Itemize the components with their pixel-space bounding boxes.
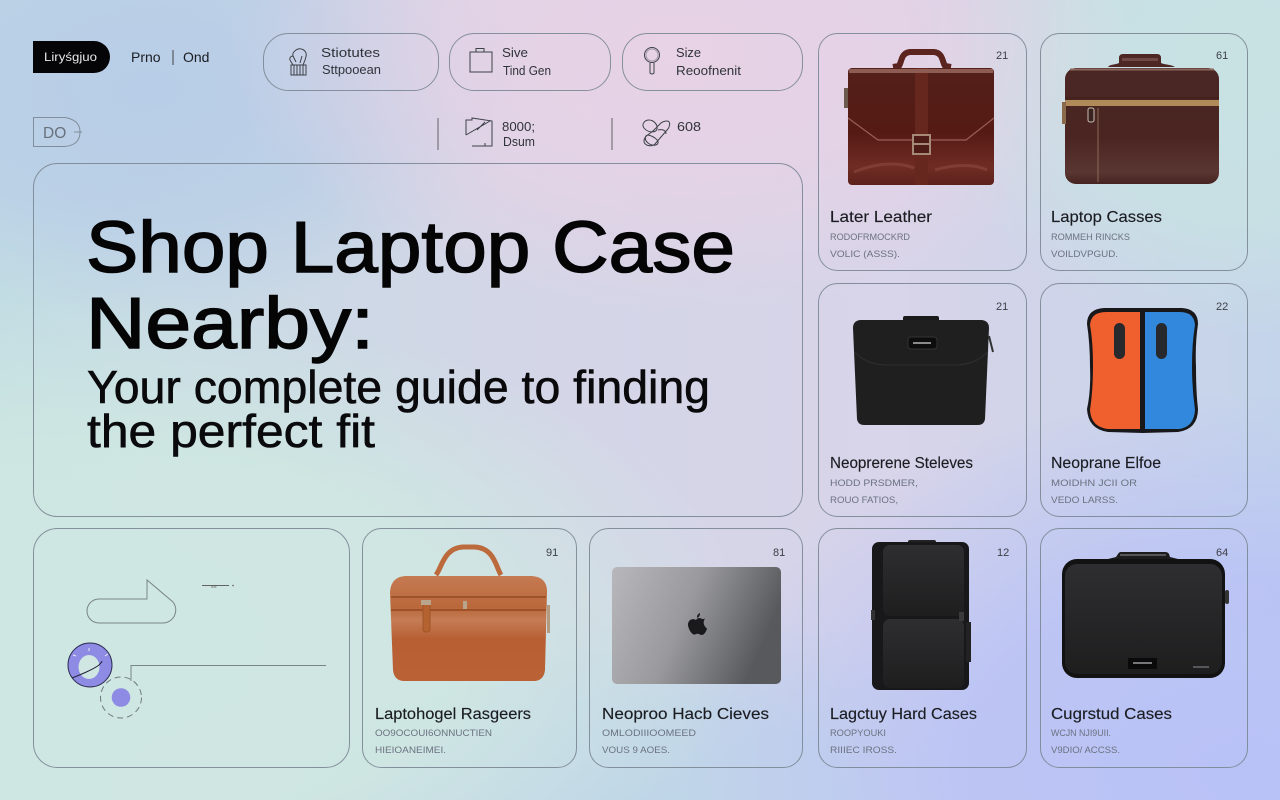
card description: OMLODIIIOOMEED — [602, 728, 696, 739]
card title: Laptohogel Rasgeers — [375, 706, 531, 723]
pill: structures — [264, 34, 438, 90]
pill: sive: Tind Gen — [503, 63, 551, 78]
pill: sive: Sive — [502, 45, 528, 60]
brand badge: Liryśgjuo — [44, 52, 97, 64]
pill: size: Size — [676, 45, 701, 60]
card: cugrstud cases — [1040, 528, 1248, 768]
stat: size count — [438, 118, 535, 150]
card description — [1051, 728, 1120, 756]
card description — [1051, 232, 1130, 260]
card description: ROUO FATIOS, — [830, 495, 898, 506]
card title: Neoproo Hacb Cieves — [602, 706, 769, 723]
number: 61 — [1216, 50, 1228, 62]
connector line — [131, 666, 326, 681]
title — [86, 208, 735, 364]
title: Nearby: — [86, 284, 374, 364]
card title: Laptop Casses — [1051, 209, 1162, 226]
pill: size: Reoofnenit — [676, 63, 741, 78]
brand badge — [33, 41, 110, 73]
icon: bulb dial — [68, 643, 112, 687]
pill: sive — [450, 34, 610, 90]
card description: HODD PRSDMER, — [830, 478, 918, 489]
pill: size — [622, 34, 802, 90]
subtitle: the perfect fit — [87, 405, 375, 457]
card description: MOIDHN JCII OR — [1051, 478, 1137, 489]
small label: ≡≡ — [211, 584, 217, 590]
card description — [602, 728, 696, 756]
card description: ROMMEH RINCKS — [1051, 232, 1130, 243]
small label — [202, 584, 234, 590]
stat: size count: 8000; — [502, 119, 535, 134]
card: neoproo hacb cieves — [590, 528, 802, 768]
tag: DO — [34, 118, 82, 146]
bag photo — [1087, 308, 1198, 433]
number: 81 — [773, 547, 785, 559]
icon: storefront bundle — [290, 49, 306, 75]
card description: VOLIC (ASSS). — [830, 249, 900, 260]
bag photo — [844, 52, 994, 185]
card: lagctuy hard cases — [818, 528, 1026, 768]
card: neoprane elfoe — [1040, 284, 1248, 516]
card description: ROOPYOUKI — [830, 728, 886, 739]
card: laptohogel rasgeers — [362, 528, 576, 768]
card description: WCJN NJI9UII. — [1051, 728, 1111, 739]
nav links: Ond — [183, 49, 209, 65]
card description: VOILDVPGUD. — [1051, 249, 1118, 260]
stat: 608 — [612, 118, 701, 150]
title: Shop Laptop Case — [86, 208, 735, 288]
icon: knot — [643, 120, 670, 146]
stat: size count: Dsum — [503, 134, 535, 149]
card description: HIEIOANEIMEI. — [375, 745, 446, 756]
laptop photo — [612, 567, 781, 684]
card: later leather — [818, 34, 1026, 270]
icon: box — [466, 118, 492, 146]
card title: Neoprane Elfoe — [1051, 455, 1161, 472]
card description: RODOFRMOCKRD — [830, 232, 910, 243]
subtitle: Your complete guide to finding — [87, 361, 710, 413]
stat: 608: 608 — [677, 119, 701, 134]
card description — [1051, 478, 1137, 506]
bag photo — [871, 540, 971, 690]
card description — [830, 232, 910, 260]
card description: VOUS 9 AOES. — [602, 745, 670, 756]
pill: structures: Stiotutes — [321, 45, 381, 60]
subtitle — [87, 361, 710, 457]
number: 21 — [996, 50, 1008, 62]
card description — [830, 728, 897, 756]
pill: structures: Sttpooean — [322, 62, 381, 77]
card title: Lagctuy Hard Cases — [830, 706, 977, 723]
panel: diagram — [34, 528, 350, 768]
card title: Neoprerene Steleves — [830, 455, 973, 472]
bag photo — [1062, 54, 1219, 184]
number: 12 — [997, 547, 1009, 559]
card description: VEDO LARSS. — [1051, 495, 1118, 506]
icon: case — [470, 48, 492, 72]
card: laptop casses — [1040, 34, 1248, 270]
number: 22 — [1216, 301, 1228, 313]
number: 64 — [1216, 547, 1228, 559]
nav links: Prno — [131, 49, 161, 65]
card description: OO9OCOUI6ONNUCTIEN — [375, 728, 492, 739]
card description: V9DIO/ ACCSS. — [1051, 745, 1120, 756]
icon: logo — [688, 613, 707, 635]
card description — [375, 728, 492, 756]
card title: Cugrstud Cases — [1051, 706, 1172, 723]
bag photo — [853, 316, 993, 425]
bag photo — [390, 547, 550, 681]
card: neoprerene sleeves — [818, 284, 1026, 516]
tag: DO: DO — [43, 125, 66, 142]
icon: target dot — [100, 677, 142, 718]
bag photo — [1062, 552, 1229, 678]
card description: RIIIEC IROSS. — [830, 745, 897, 756]
icon: magnifier — [644, 48, 660, 74]
panel: hero — [34, 164, 802, 516]
number: 91 — [546, 547, 558, 559]
card description — [830, 478, 918, 506]
card title: Later Leather — [830, 209, 933, 226]
number: 21 — [996, 301, 1008, 313]
speech outline — [87, 580, 176, 623]
nav links — [131, 49, 209, 65]
